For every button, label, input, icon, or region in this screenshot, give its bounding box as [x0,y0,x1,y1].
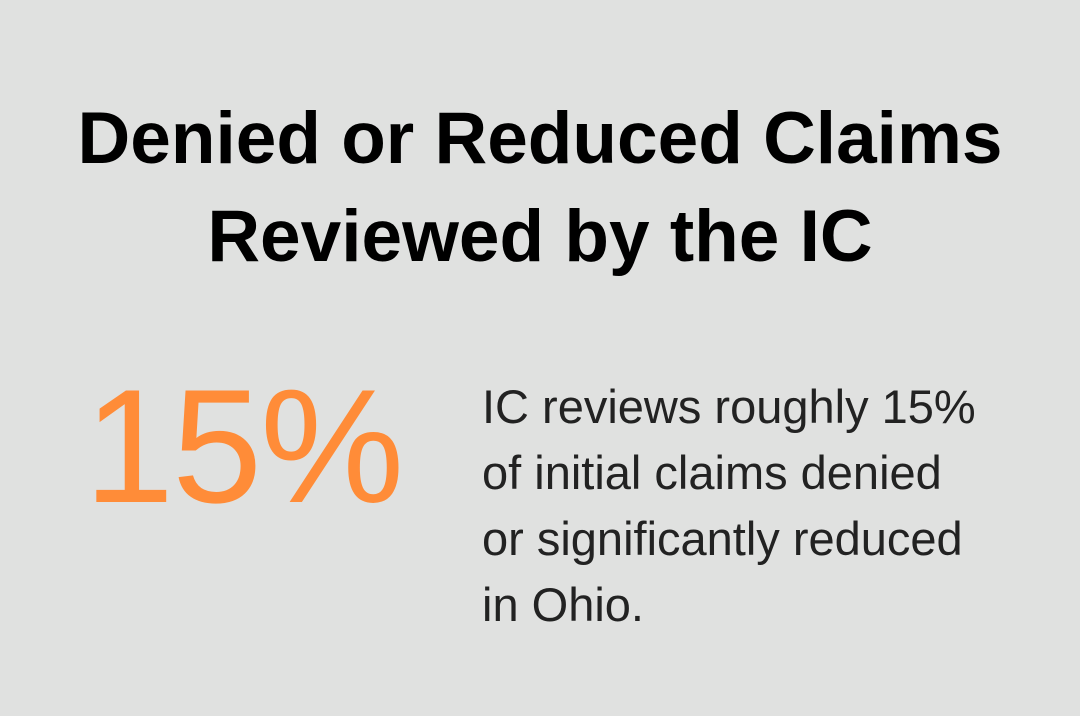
title: Reviewed by the IC [207,196,873,277]
title: Denied or Reduced Claims [78,98,1002,179]
description text: in Ohio. [482,578,644,631]
big stat: 15%: 15% [84,356,402,537]
description text: of initial claims denied [482,446,942,499]
title [78,98,1002,277]
description text: IC reviews roughly 15% [482,380,976,433]
description text [482,380,976,631]
description text: or significantly reduced [482,512,963,565]
